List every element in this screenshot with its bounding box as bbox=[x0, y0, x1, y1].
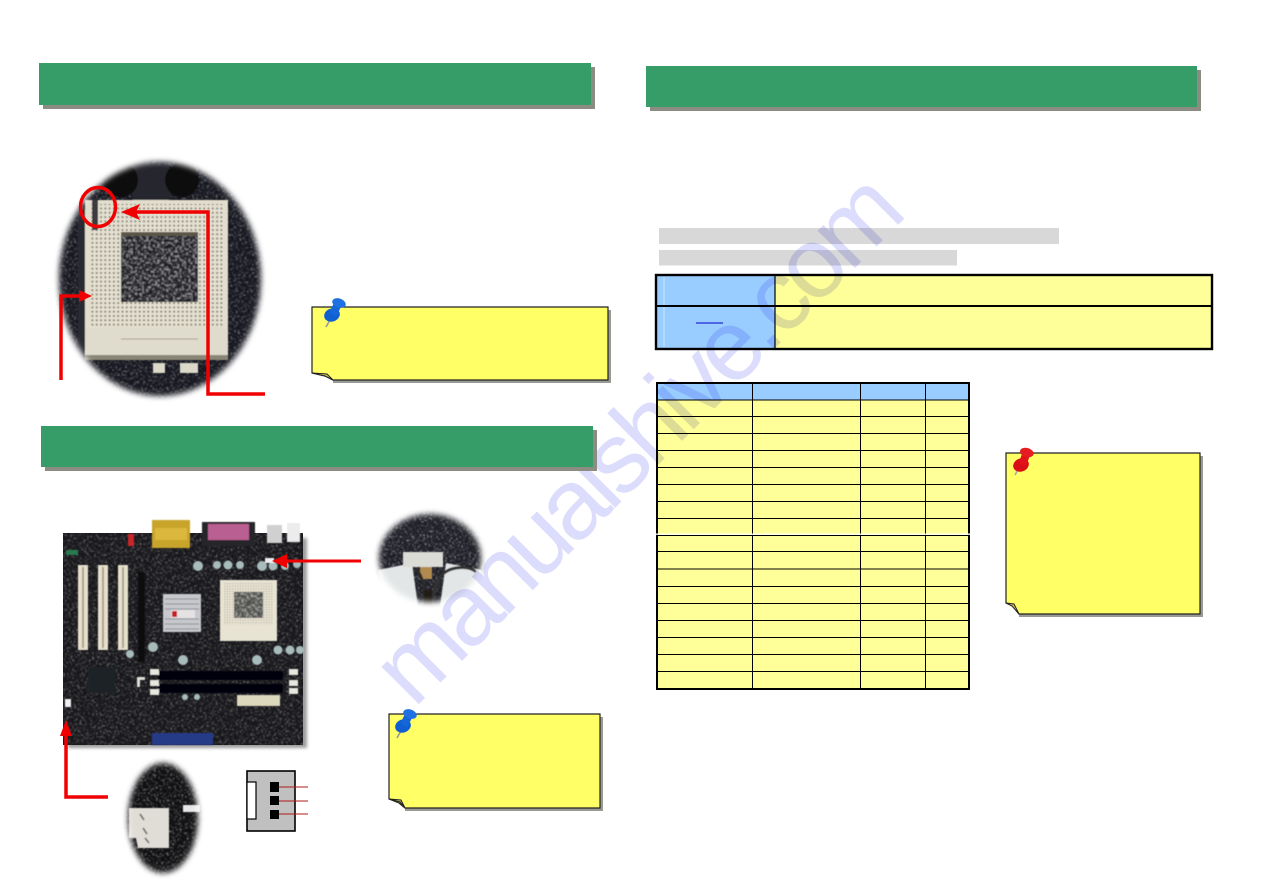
marker: red circle on pin 1 corner bbox=[80, 188, 116, 226]
red part bbox=[128, 534, 134, 546]
note: right sticky with red pin bbox=[1006, 446, 1203, 617]
photo: CPU fan header oval bbox=[374, 510, 486, 607]
heat sink bbox=[163, 594, 201, 632]
white fan header on board bbox=[265, 558, 274, 563]
AGP slot bbox=[138, 572, 145, 662]
arrow: to CPU fan header bbox=[272, 554, 361, 568]
note: lower left sticky with blue pin bbox=[389, 707, 603, 811]
memory slots bbox=[137, 669, 298, 695]
fan 2 header on board bbox=[65, 699, 71, 707]
ATX power connector bbox=[237, 695, 280, 706]
banner: top left section heading bbox=[39, 63, 595, 109]
table: processor compatibility grid bbox=[655, 383, 971, 689]
banner: top right section heading bbox=[646, 66, 1201, 111]
note: top left sticky with blue pin bbox=[312, 296, 611, 383]
icon: red push pin bbox=[1011, 446, 1035, 475]
IDE slot bbox=[152, 733, 213, 745]
icon: blue push pin bbox=[393, 707, 418, 738]
icon: blue push pin bbox=[322, 296, 347, 327]
PCI slots bbox=[78, 565, 128, 650]
capacitors bbox=[126, 560, 304, 700]
link underline bbox=[696, 322, 723, 324]
green parts bbox=[66, 550, 78, 555]
CPU socket bbox=[220, 580, 277, 641]
photo: fan 2 header oval bbox=[123, 758, 203, 878]
chipset bbox=[88, 667, 115, 693]
photo: motherboard bbox=[63, 520, 307, 748]
arrow: to socket lever bbox=[61, 290, 92, 380]
rear ports bbox=[152, 520, 300, 548]
arrow: to socket pin 1 corner bbox=[121, 204, 265, 394]
watermark: manualshive.com bbox=[350, 150, 925, 725]
diagram: fan connector pinout bbox=[247, 771, 308, 831]
highlighted text bars bbox=[659, 228, 1059, 266]
arrow: to fan 2 header bbox=[60, 720, 108, 797]
photo: CPU socket oval bbox=[54, 157, 266, 401]
banner: lower left section heading bbox=[41, 426, 597, 471]
table: top two-row summary bbox=[656, 275, 1212, 349]
